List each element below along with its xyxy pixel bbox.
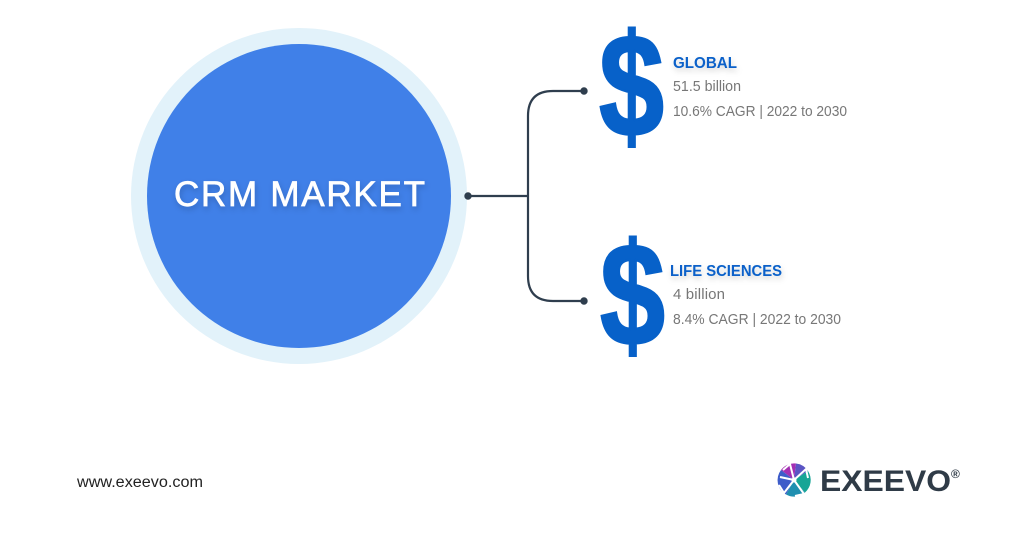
icon: dollar sign global: $: [599, 4, 664, 167]
panel: CRM market circle: [131, 28, 467, 364]
text: EXEEVO wordmark: EXEEVO: [820, 465, 951, 498]
panel: life sciences market: [600, 213, 841, 376]
text: global value: 51.5 billion: [673, 79, 741, 95]
panel: global market: [599, 4, 847, 167]
text: website: www.exeevo.com: [76, 474, 203, 491]
text: global CAGR: 10.6% CAGR | 2022 to 2030: [673, 104, 847, 120]
icon: logo mark: [778, 463, 811, 497]
connector: bracket linking circle to both markets: [465, 88, 587, 304]
text: life sciences value: 4 billion: [673, 286, 725, 303]
icon: dollar sign life sciences: $: [600, 213, 665, 376]
text: registered mark: ®: [951, 467, 960, 481]
heading: LIFE SCIENCES: LIFE SCIENCES: [670, 263, 782, 280]
text: life sciences CAGR: 8.4% CAGR | 2022 to 2030: [673, 312, 841, 328]
heading: GLOBAL: GLOBAL: [673, 55, 737, 72]
logo: Exeevo: [778, 463, 960, 498]
heading: CRM MARKET: CRM MARKET: [174, 175, 425, 214]
